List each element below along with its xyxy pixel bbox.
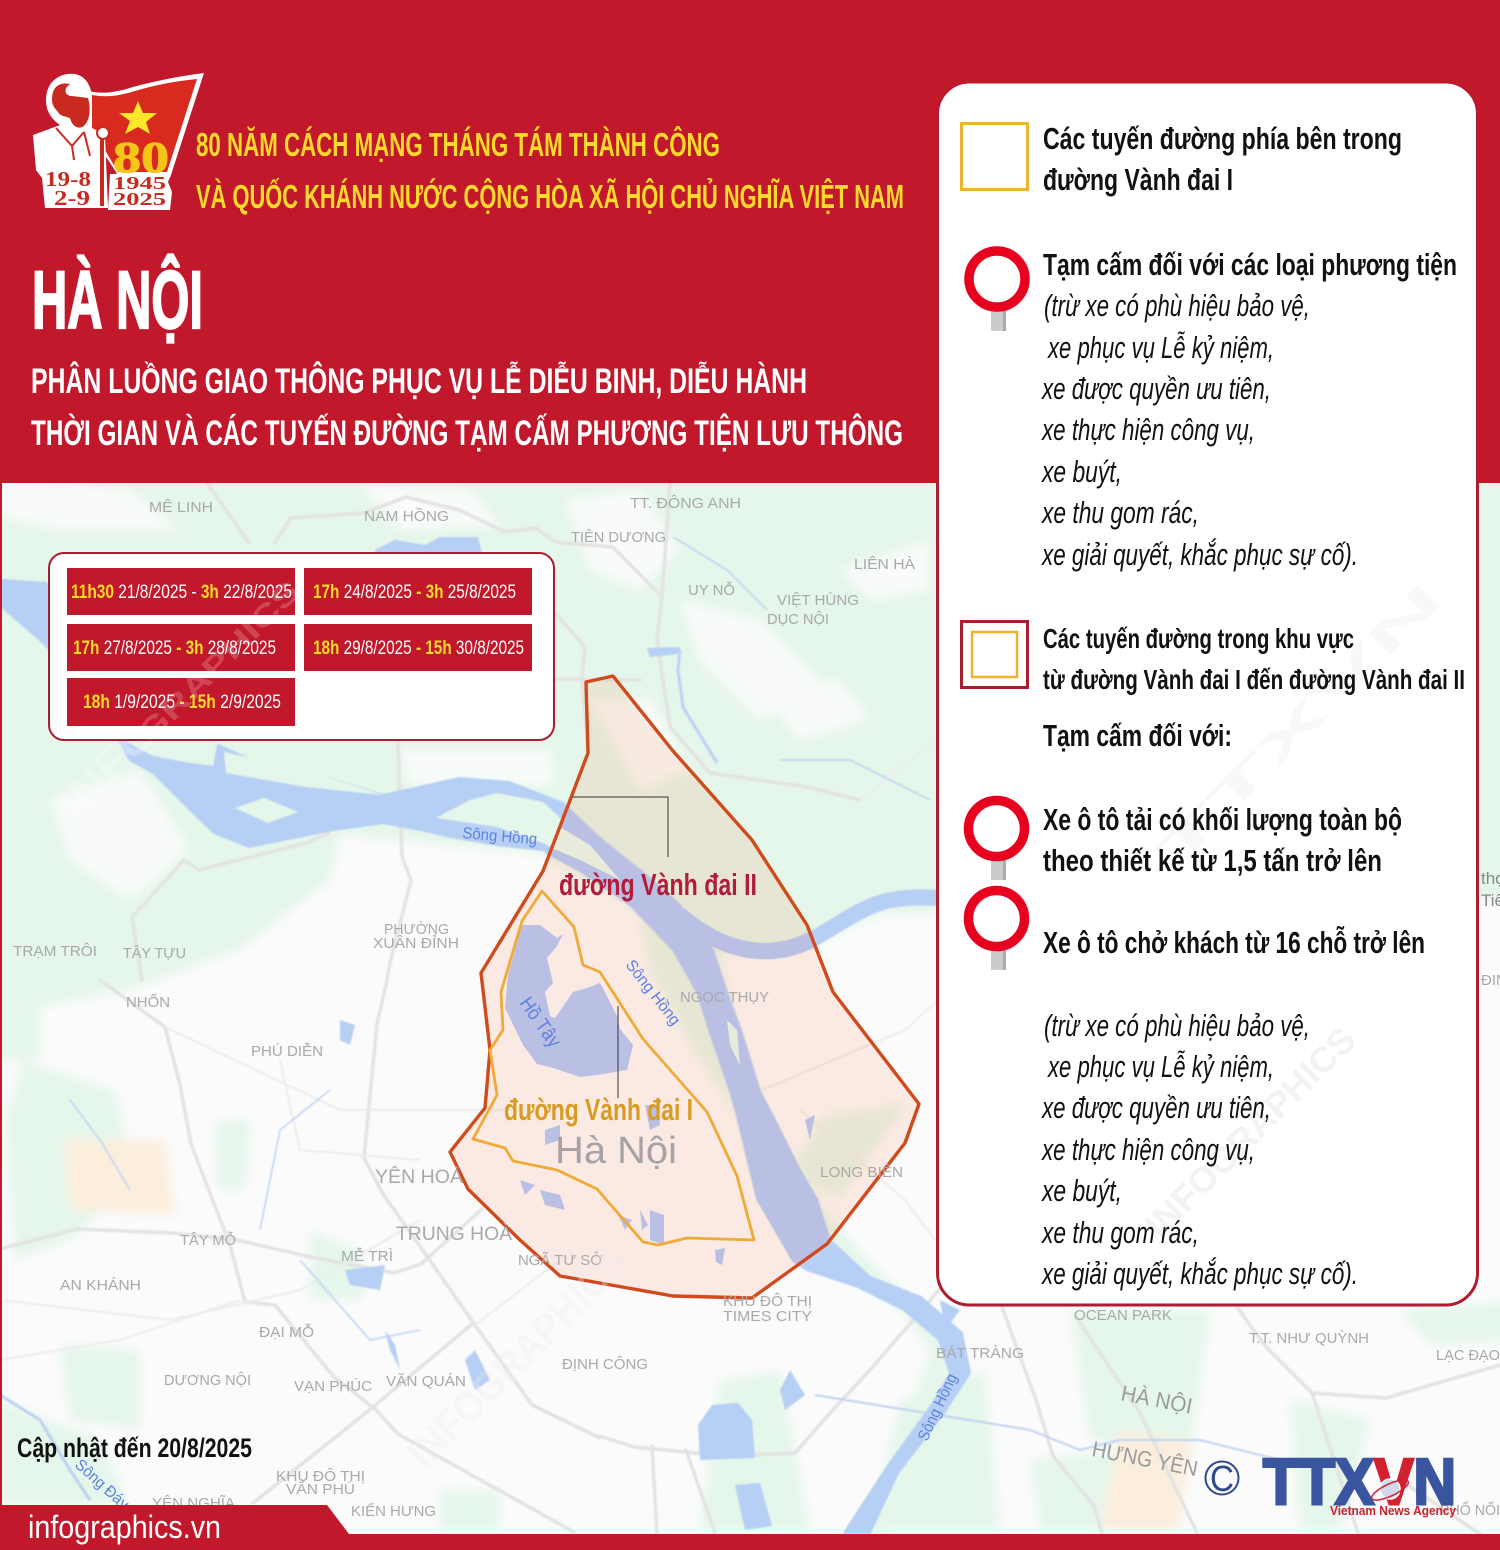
date range 5 <box>67 678 295 726</box>
map place labels: LONG BIÊN <box>820 1164 903 1181</box>
text block: first restrictions: xe buýt, <box>1041 454 1122 489</box>
map place labels: KHU ĐÔ THỊ <box>276 1468 365 1485</box>
map place labels: KIẾN HƯNG <box>351 1503 436 1520</box>
subtitle: PHÂN LUỒNG GIAO THÔNG PHỤC VỤ LỄ DIỄU BINH, DIỄU HÀNH <box>31 361 807 401</box>
logo: 80 years anniversary emblem: 80 <box>113 133 169 182</box>
panel: restrictions legend <box>936 82 1479 1305</box>
text block: exemptions: (trừ xe có phù hiệu bảo vệ, <box>1044 1008 1310 1043</box>
logo: TTXVN news agency: Vietnam News Agency <box>1330 1503 1457 1518</box>
ring road II zone overlay <box>450 676 940 1298</box>
ring road I line <box>473 891 754 1245</box>
legend item: ring road I to II: Các tuyến đường trong khu vực <box>1043 623 1354 654</box>
source site: infographics.vn <box>28 1509 221 1545</box>
text block: exemptions <box>1041 1008 1358 1291</box>
icon: no-entry sign 3 <box>968 890 1024 970</box>
icon: no-entry sign 1 <box>969 251 1025 331</box>
map callout: ring road II <box>559 797 757 902</box>
map callout: ring road I: đường Vành đai I <box>504 1092 693 1127</box>
text block: exemptions: xe buýt, <box>1041 1173 1122 1208</box>
map place labels: HƯNG YÊN <box>1090 1436 1200 1481</box>
heading: anniversary yellow lines: VÀ QUỐC KHÁNH NƯỚC CỘNG HÒA XÃ HỘI CHỦ NGHĨA VIỆT NAM <box>196 177 904 215</box>
text block: trucks <box>1043 802 1402 878</box>
text block: exemptions: xe giải quyết, khắc phục sự cố). <box>1041 1256 1358 1291</box>
map place labels <box>13 495 1500 1520</box>
panel: time schedule <box>49 553 554 750</box>
map background <box>0 460 1500 1550</box>
legend item: inside ring road I <box>962 121 1402 197</box>
map place labels: ĐẠI MỖ <box>259 1323 314 1341</box>
map place labels: DƯƠNG NỘI <box>164 1372 251 1389</box>
roads <box>0 483 1500 1534</box>
map place labels: VIỆT HÙNG <box>777 592 859 609</box>
map watermarks <box>48 708 636 1476</box>
map place labels: MÊ LINH <box>149 499 213 516</box>
update date: Cập nhật đến 20/8/2025 <box>17 1433 252 1463</box>
text block: first restrictions <box>1041 247 1457 572</box>
map place labels: YÊN NGHĨA <box>152 1495 235 1512</box>
map place labels: NAM HỒNG <box>364 507 449 525</box>
date range 5: 18h 1/9/2025 - 15h 2/9/2025 <box>83 692 281 713</box>
map place labels: LIÊN HÀ <box>854 556 915 573</box>
date range 4 <box>304 624 532 671</box>
map place labels: LẠC ĐẠO <box>1436 1347 1500 1364</box>
text block: first restrictions: (trừ xe có phù hiệu bảo vệ, <box>1044 288 1310 323</box>
date range 1: 11h30 21/8/2025 - 3h 22/8/2025 <box>71 582 292 603</box>
bottom footer band <box>0 1505 1500 1550</box>
panel watermarks: INFOGRAPHICS <box>1137 1019 1364 1246</box>
text block: first restrictions: xe được quyền ưu tiên, <box>1041 371 1271 406</box>
heading: anniversary yellow lines <box>196 125 904 215</box>
date range 1 <box>67 568 295 615</box>
text block: exemptions: xe được quyền ưu tiên, <box>1041 1090 1271 1125</box>
map place labels: TÂY TỰU <box>123 945 186 962</box>
map place labels: NHỔN <box>126 993 170 1011</box>
heading: anniversary yellow lines: 80 NĂM CÁCH MẠNG THÁNG TÁM THÀNH CÔNG <box>196 125 720 163</box>
river <box>0 537 1280 1533</box>
map place labels: Hà Nội <box>555 1130 677 1172</box>
map place labels: Sông Đáy <box>71 1456 132 1513</box>
legend item: ring road I to II <box>962 622 1465 695</box>
icon: no-entry sign 2 <box>968 800 1024 880</box>
heading: banned for: Tạm cấm đối với: <box>1043 718 1232 753</box>
subtitle: THỜI GIAN VÀ CÁC TUYẾN ĐƯỜNG TẠM CẤM PHƯƠNG TIỆN LƯU THÔNG <box>31 413 903 453</box>
text block: first restrictions: xe phục vụ Lễ kỷ niệm, <box>1047 330 1274 365</box>
map place labels: TRUNG HOÀ <box>396 1224 512 1245</box>
map place labels: TIMES CITY <box>723 1308 812 1325</box>
panel watermarks: TTXVN <box>1147 574 1451 877</box>
map place labels: KHU ĐÔ THỊ <box>723 1293 812 1310</box>
map place labels: NGÃ TƯ SỞ <box>518 1251 603 1269</box>
map place labels: TT. ĐÔNG ANH <box>630 495 741 512</box>
map place labels: PHƯỜNG <box>384 921 449 938</box>
map place labels: TÂY MỖ <box>180 1231 236 1249</box>
map place labels: Sông Hồng <box>915 1371 961 1444</box>
text block: exemptions: xe thu gom rác, <box>1041 1215 1199 1250</box>
date range 2 <box>304 568 532 615</box>
map place labels: AN KHÁNH <box>60 1277 141 1294</box>
logo: 80 years anniversary emblem: 1945 <box>113 173 166 193</box>
map place labels: BÁT TRÀNG <box>936 1345 1024 1362</box>
subtitle <box>31 361 903 453</box>
map place labels: Sông Hồng <box>622 957 683 1029</box>
text block: trucks: theo thiết kế từ 1,5 tấn trở lên <box>1043 843 1382 878</box>
panel watermarks <box>1137 574 1451 1246</box>
logo: 80 years anniversary emblem: 19-8 <box>45 167 91 191</box>
map place labels: PHÚ DIỄN <box>251 1043 323 1060</box>
text block: first restrictions: xe thu gom rác, <box>1041 495 1199 530</box>
map place labels: NGỌC THỤY <box>680 989 769 1006</box>
title: HÀ NỘI <box>32 255 203 346</box>
logo: 80 years anniversary emblem: 2025 <box>113 189 166 209</box>
map watermarks: INFOGRAPHICS <box>398 1238 636 1476</box>
map place labels: DỤC NỘI <box>767 611 829 628</box>
map place labels: OCEAN PARK <box>1074 1307 1172 1324</box>
date range 3: 17h 27/8/2025 - 3h 28/8/2025 <box>73 638 276 659</box>
map place labels: TIÊN DƯƠNG <box>571 529 666 546</box>
map watermarks: INFO <box>48 708 166 826</box>
map place labels: VĂN PHÚ <box>286 1481 355 1498</box>
ring road II line <box>450 676 919 1298</box>
text block: exemptions: xe phục vụ Lễ kỷ niệm, <box>1047 1049 1274 1084</box>
map place labels: YÊN HOÀ <box>375 1166 463 1188</box>
map place labels: Hồ Tây <box>515 993 565 1052</box>
map place labels: TRẠM TRÔI <box>13 943 97 960</box>
map place labels: HÀ NỘI <box>1119 1380 1194 1419</box>
map place labels: XUÂN ĐỈNH <box>373 935 459 952</box>
schedule watermark: GRAPHICS <box>132 575 307 750</box>
red header band <box>0 0 1500 483</box>
logo: 80 years anniversary emblem: 2-9 <box>54 186 90 210</box>
date range 4: 18h 29/8/2025 - 15h 30/8/2025 <box>313 638 524 659</box>
map place labels: ĐỊNH CÔNG <box>562 1356 648 1373</box>
logo: TTXVN news agency: TTXVN <box>1263 1445 1456 1518</box>
logo: 80 years anniversary emblem <box>33 73 204 210</box>
map place labels: UY NỖ <box>688 581 735 599</box>
text block: first restrictions: xe thực hiện công vụ, <box>1041 412 1255 447</box>
map callout: ring road II: đường Vành đai II <box>559 867 757 902</box>
text block: exemptions: xe thực hiện công vụ, <box>1041 1132 1255 1167</box>
map place labels: T.T. NHƯ QUỲNH <box>1249 1330 1369 1347</box>
map place labels: MỄ TRÌ <box>341 1248 393 1265</box>
date range 2: 17h 24/8/2025 - 3h 25/8/2025 <box>313 582 516 603</box>
text block: first restrictions: xe giải quyết, khắc phục sự cố). <box>1041 537 1358 572</box>
date range 3 <box>67 624 295 671</box>
map place labels: VĂN QUÁN <box>386 1373 466 1390</box>
map place labels: Sông Hồng <box>462 825 538 849</box>
logo: TTXVN news agency: C <box>1210 1458 1234 1499</box>
map place labels: VẠN PHÚC <box>294 1378 372 1395</box>
legend item: inside ring road I: đường Vành đai I <box>1043 162 1233 197</box>
